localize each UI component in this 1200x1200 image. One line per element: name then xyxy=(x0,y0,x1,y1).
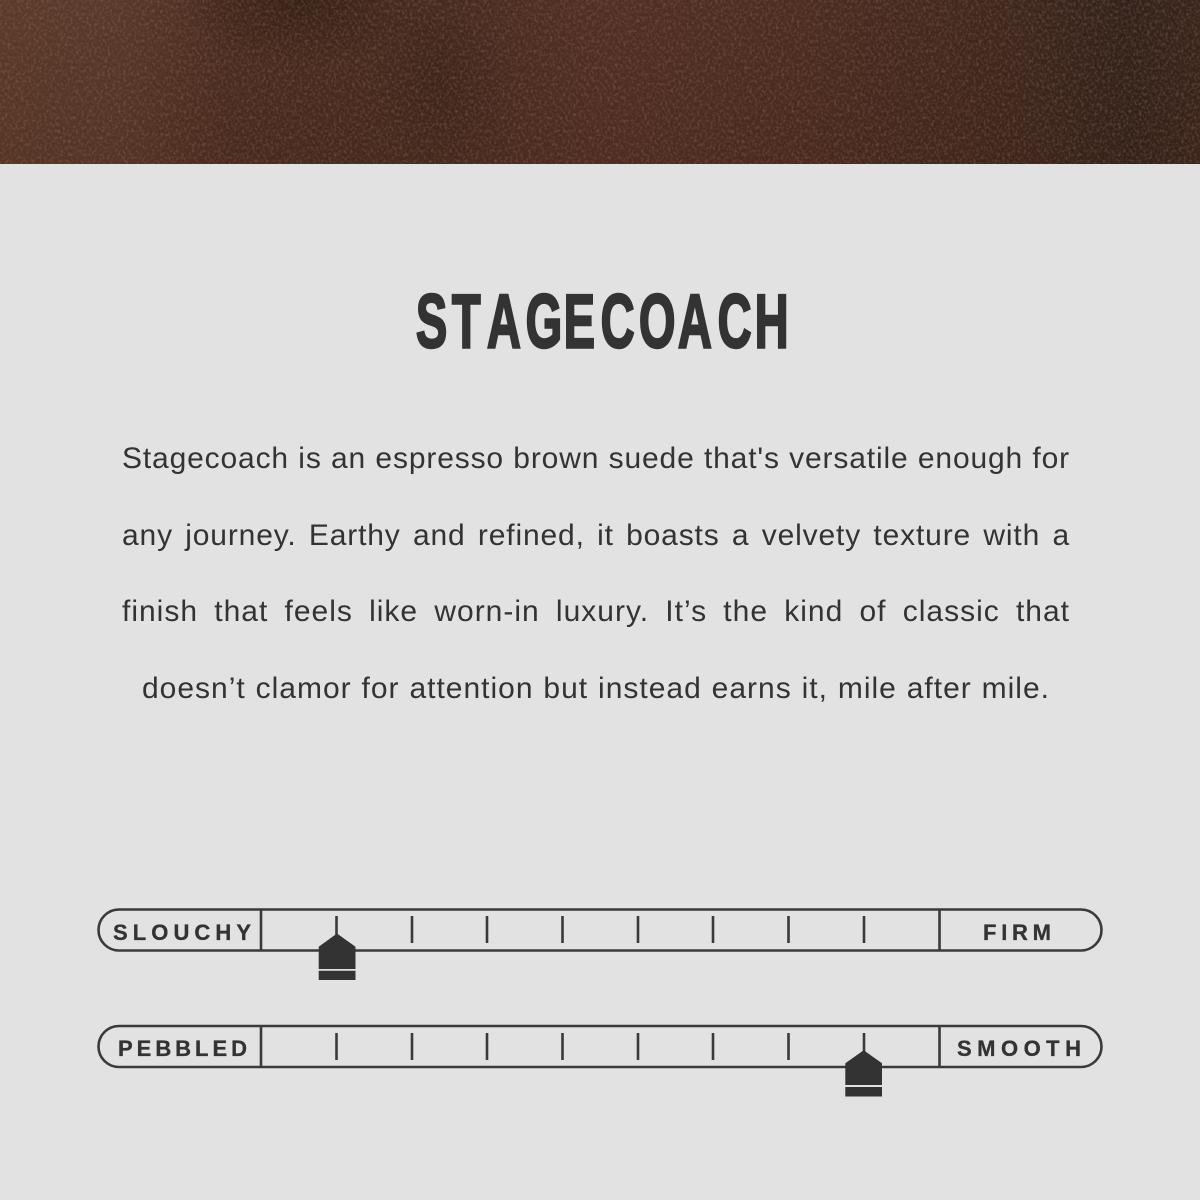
body text: Stagecoach is an espresso brown suede that's versatile enough for xyxy=(122,442,1070,475)
label: slouchy: SLOUCHY xyxy=(113,920,251,945)
label: firm: FIRM xyxy=(983,920,1051,945)
title: STAGECOACH xyxy=(416,280,789,364)
marker: pebbled-smooth xyxy=(845,1050,882,1096)
scale track xyxy=(98,910,1102,950)
marker: slouchy-firm xyxy=(319,934,356,980)
body text xyxy=(122,442,1070,705)
scale track xyxy=(98,1026,1102,1067)
label: pebbled: PEBBLED xyxy=(118,1036,247,1061)
banner: brown suede texture xyxy=(0,0,1200,164)
body text: any journey. Earthy and refined, it boasts a velvety texture with a xyxy=(122,519,1070,552)
body text: doesn’t clamor for attention but instead earns it, mile after mile. xyxy=(142,672,1050,705)
label: smooth: SMOOTH xyxy=(957,1036,1081,1061)
body text: finish that feels like worn-in luxury. It’s the kind of classic that xyxy=(122,595,1070,628)
